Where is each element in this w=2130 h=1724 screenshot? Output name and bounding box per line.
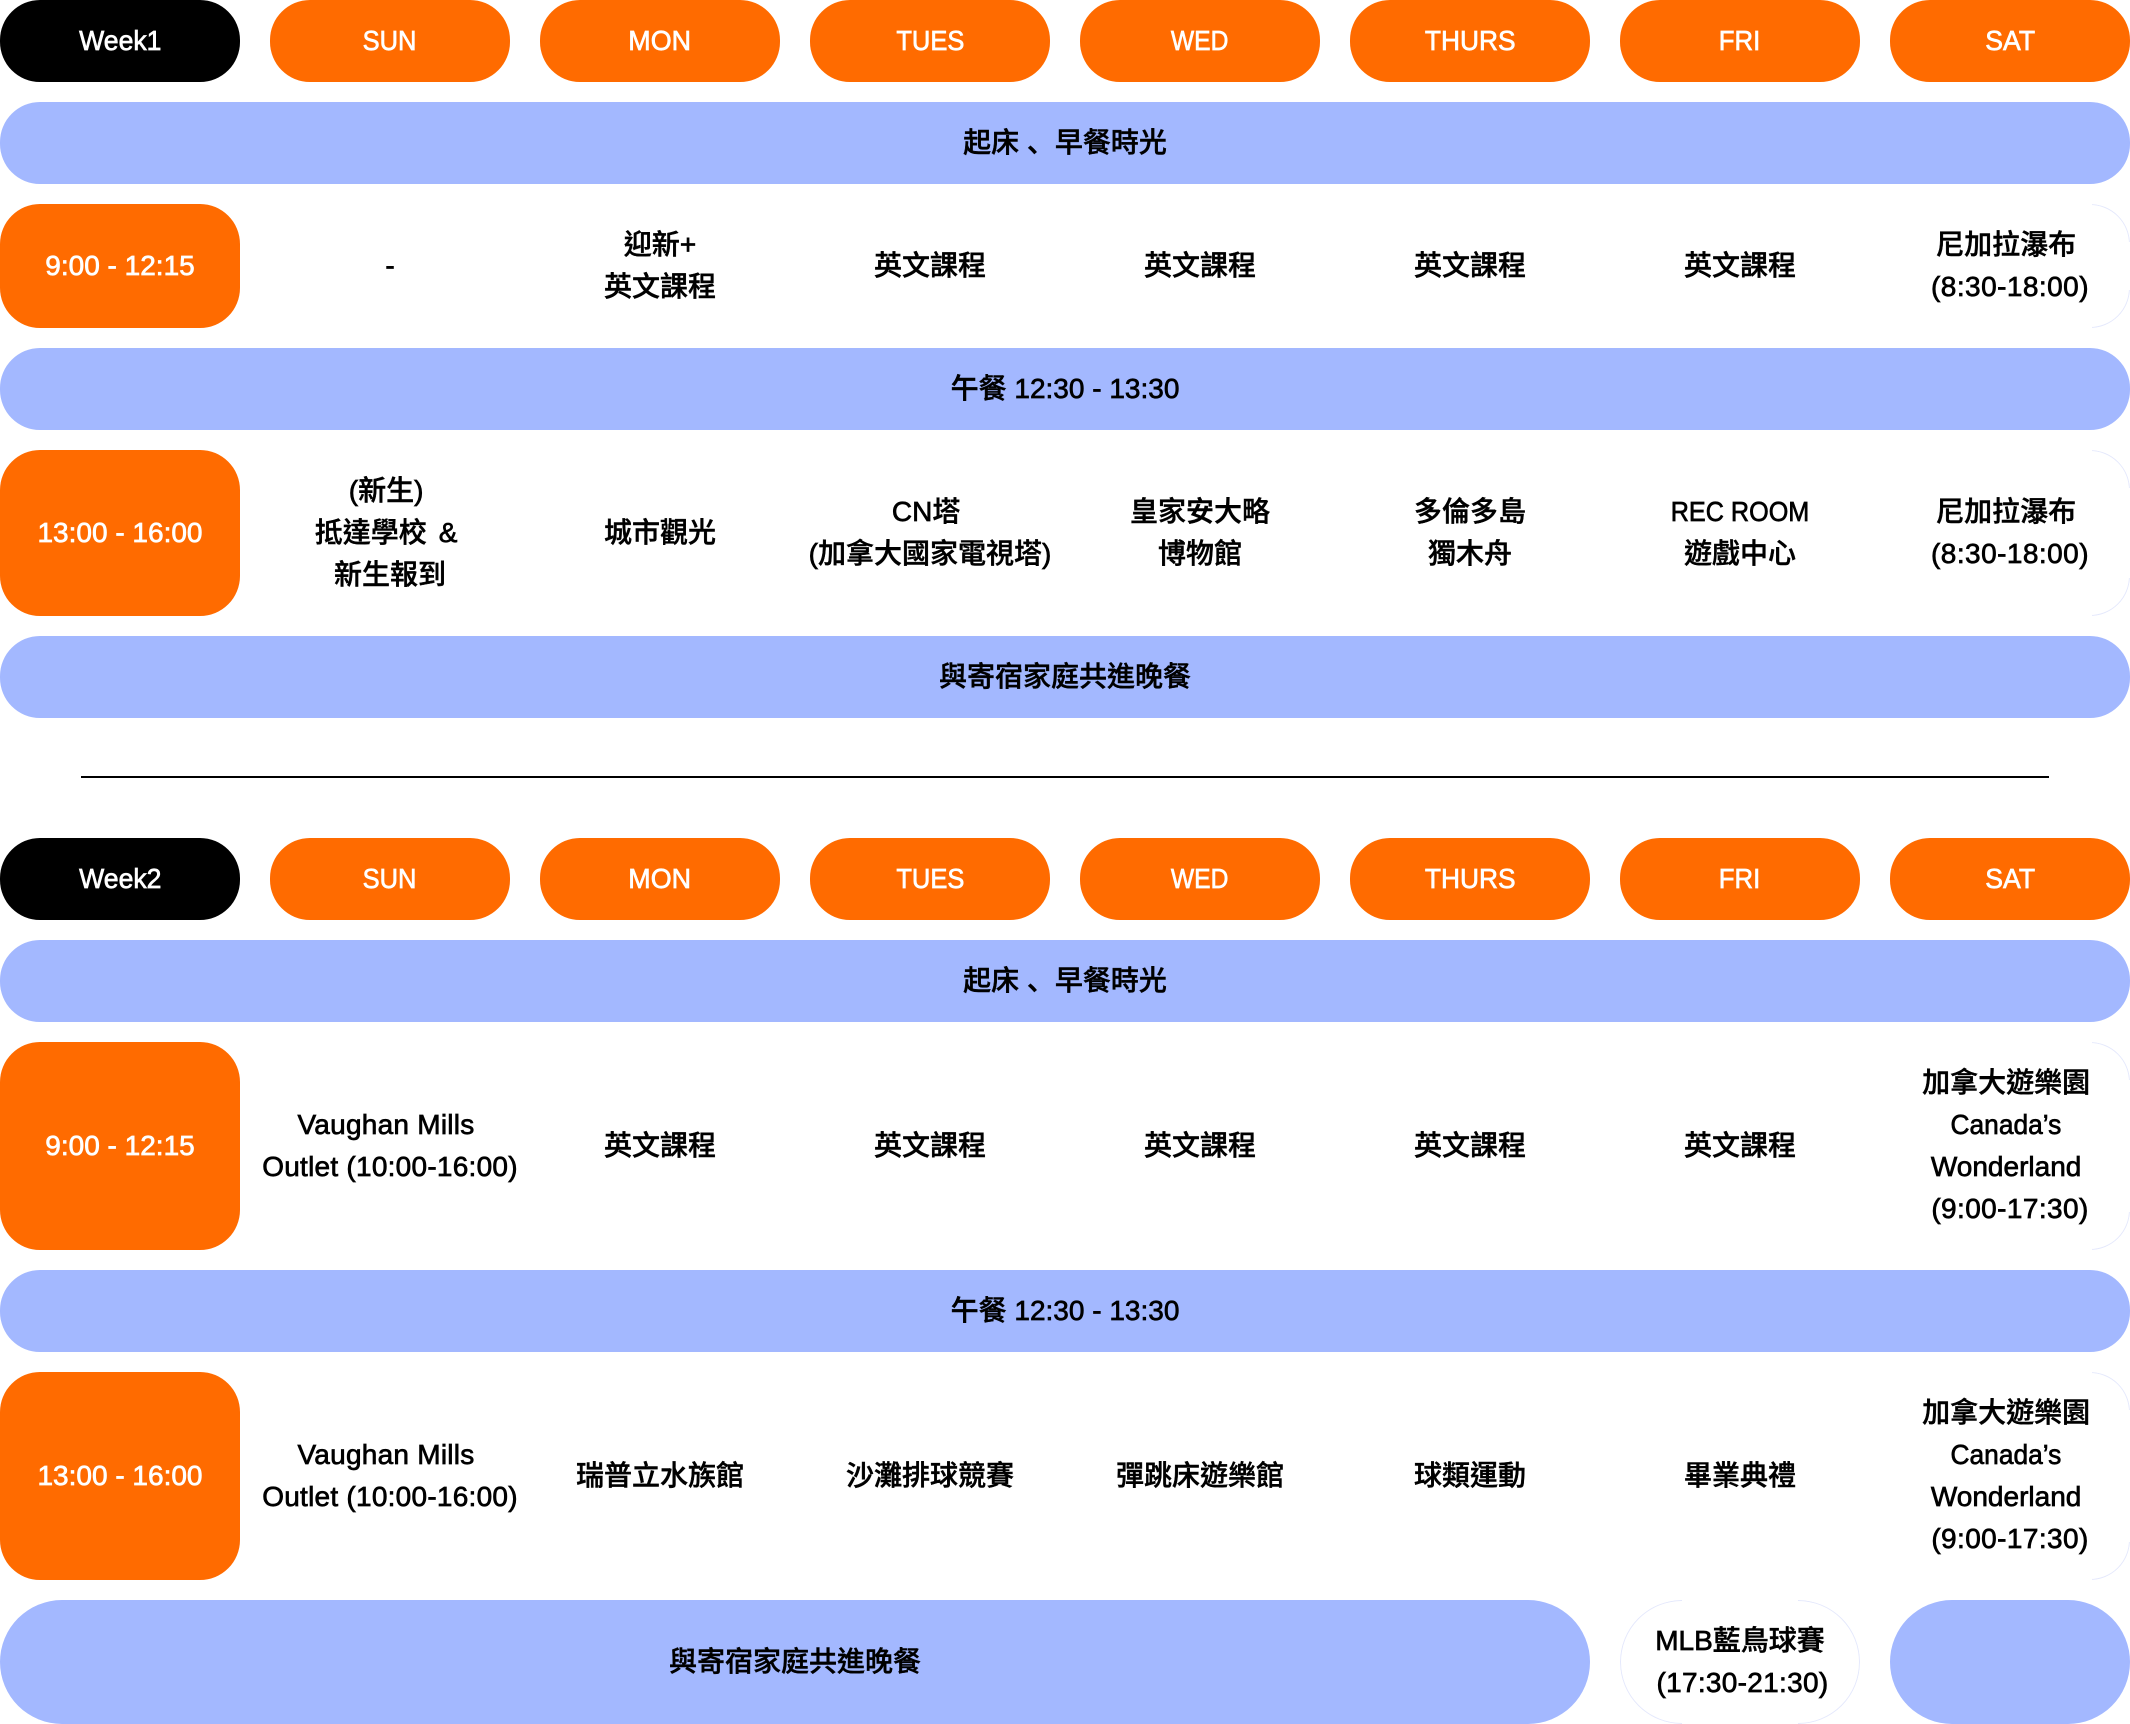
lunch band: 午餐 12:30 - 13:30 (951, 373, 1179, 404)
Friday afternoon cell: 畢業典禮 (1684, 1460, 1796, 1491)
Sunday morning cell: Vaughan Mills (297, 1109, 474, 1140)
Monday morning cell (604, 229, 716, 302)
Tuesday afternoon cell: CN塔 (892, 496, 960, 527)
day header: SUN: SUN (363, 25, 417, 56)
Friday afternoon cell: REC ROOM (1671, 496, 1809, 527)
Saturday afternoon cell (1890, 1372, 2130, 1580)
Thursday morning cell: 英文課程 (1414, 1130, 1526, 1161)
Friday evening cell: MLB game (1620, 1600, 1860, 1724)
Monday afternoon cell: 城市觀光 (604, 517, 716, 548)
Wednesday morning cell: 英文課程 (1144, 1130, 1256, 1161)
Sunday morning cell (262, 1109, 518, 1182)
day header: THURS (1350, 0, 1590, 82)
day header: SAT: SAT (1985, 863, 2035, 894)
dinner band: Sunday to Thursday (0, 1600, 1590, 1724)
Monday morning cell: 迎新+ (624, 229, 696, 260)
Sunday afternoon cell: 抵達學校 & (315, 517, 457, 548)
day header: THURS: THURS (1425, 863, 1515, 894)
time label: morning: 9:00 - 12:15 (45, 250, 195, 281)
Tuesday afternoon cell: (加拿大國家電視塔) (809, 538, 1051, 569)
Saturday morning cell (1890, 1042, 2130, 1250)
Sunday afternoon cell (315, 475, 458, 590)
day header: THURS (1350, 838, 1590, 920)
breakfast band (0, 940, 2130, 1022)
time label: afternoon: 13:00 - 16:00 (37, 1460, 203, 1491)
Thursday afternoon cell: 獨木舟 (1428, 538, 1512, 569)
day header: MON: MON (629, 25, 691, 56)
panel: week 2 schedule (0, 838, 2130, 1724)
Friday evening cell: MLB game: (17:30-21:30) (1656, 1667, 1828, 1698)
day header: TUES: TUES (896, 25, 964, 56)
Friday morning cell: 英文課程 (1684, 250, 1796, 281)
Wednesday afternoon cell: 彈跳床遊樂館 (1116, 1460, 1284, 1491)
day header: WED: WED (1171, 863, 1229, 894)
Saturday morning cell: (9:00-17:30) (1931, 1193, 2089, 1224)
Saturday afternoon cell: Wonderland (1931, 1481, 2081, 1512)
time label: morning (0, 1042, 240, 1250)
day header: WED (1080, 0, 1320, 82)
Thursday afternoon cell: 多倫多島 (1414, 496, 1526, 527)
day header: TUES (810, 0, 1050, 82)
Friday evening cell: MLB game: MLB藍鳥球賽 (1655, 1625, 1825, 1656)
day header: WED: WED (1171, 25, 1229, 56)
day header: SAT (1890, 838, 2130, 920)
day header: MON (540, 0, 780, 82)
lunch band (0, 348, 2130, 430)
day header: TUES (810, 838, 1050, 920)
breakfast band: 起床 、早餐時光 (963, 959, 1167, 999)
dinner band: Sunday to Thursday: 與寄宿家庭共進晚餐 (669, 1646, 921, 1677)
Monday morning cell: 英文課程 (604, 271, 716, 302)
Sunday afternoon cell: Vaughan Mills (297, 1439, 474, 1470)
day header: THURS: THURS (1425, 25, 1515, 56)
week 2 label (0, 838, 240, 920)
day header: FRI: FRI (1719, 863, 1761, 894)
Saturday afternoon cell: 尼加拉瀑布 (1936, 496, 2076, 527)
Sunday afternoon cell (262, 1439, 518, 1512)
Saturday morning cell (1890, 204, 2130, 328)
Monday morning cell: 英文課程 (604, 1130, 716, 1161)
week 1 label: Week1 (79, 25, 161, 56)
Wednesday afternoon cell (1130, 496, 1270, 569)
Sunday afternoon cell: (新生) (349, 475, 423, 506)
Saturday morning cell: Wonderland (1931, 1151, 2081, 1182)
Saturday afternoon cell: Canada’s (1951, 1439, 2061, 1470)
lunch band (0, 1270, 2130, 1352)
Wednesday afternoon cell: 博物館 (1158, 538, 1242, 569)
panel: week 1 schedule (0, 0, 2130, 718)
Sunday afternoon cell: Outlet (10:00-16:00) (262, 1481, 518, 1512)
dinner band: 與寄宿家庭共進晚餐 (939, 661, 1191, 692)
Thursday morning cell: 英文課程 (1414, 250, 1526, 281)
Saturday evening block (1890, 1600, 2130, 1724)
Saturday morning cell: (8:30-18:00) (1931, 271, 2089, 302)
day header: SUN (270, 838, 510, 920)
day header: SUN: SUN (363, 863, 417, 894)
Saturday morning cell: 尼加拉瀑布 (1936, 229, 2076, 260)
time label: morning: 9:00 - 12:15 (45, 1130, 195, 1161)
Sunday afternoon cell: 新生報到 (334, 559, 446, 590)
time label: morning (0, 204, 240, 328)
time label: afternoon (0, 1372, 240, 1580)
Tuesday afternoon cell (809, 496, 1051, 570)
Tuesday morning cell: 英文課程 (874, 1130, 986, 1161)
Friday morning cell: 英文課程 (1684, 1130, 1796, 1161)
Friday afternoon cell: 遊戲中心 (1684, 538, 1796, 569)
breakfast band: 起床 、早餐時光 (963, 121, 1167, 161)
day header: MON (540, 838, 780, 920)
Tuesday afternoon cell: 沙灘排球競賽 (846, 1460, 1014, 1491)
lunch band: 午餐 12:30 - 13:30 (951, 1295, 1179, 1326)
day header: FRI (1620, 838, 1860, 920)
time label: afternoon (0, 450, 240, 616)
day header: SAT (1890, 0, 2130, 82)
dinner band (0, 636, 2130, 718)
Thursday afternoon cell (1414, 496, 1526, 569)
day header: FRI (1620, 0, 1860, 82)
time label: afternoon: 13:00 - 16:00 (37, 517, 203, 548)
Sunday morning cell: Outlet (10:00-16:00) (262, 1151, 518, 1182)
Wednesday morning cell: 英文課程 (1144, 250, 1256, 281)
breakfast band (0, 102, 2130, 184)
Saturday morning cell: 加拿大遊樂園 (1922, 1067, 2090, 1098)
Saturday morning cell: Canada’s (1951, 1109, 2061, 1140)
day header: SUN (270, 0, 510, 82)
Sunday morning cell: - (385, 250, 395, 281)
day header: FRI: FRI (1719, 25, 1761, 56)
day header: TUES: TUES (896, 863, 964, 894)
Saturday afternoon cell (1890, 450, 2130, 616)
Saturday afternoon cell: 加拿大遊樂園 (1922, 1397, 2090, 1428)
day header: SAT: SAT (1985, 25, 2035, 56)
Monday afternoon cell: 瑞普立水族館 (576, 1460, 744, 1491)
Tuesday morning cell: 英文課程 (874, 250, 986, 281)
week 1 label (0, 0, 240, 82)
Thursday afternoon cell: 球類運動 (1414, 1460, 1526, 1491)
day header: WED (1080, 838, 1320, 920)
Saturday afternoon cell: (8:30-18:00) (1931, 538, 2089, 569)
Saturday afternoon cell: (9:00-17:30) (1931, 1523, 2089, 1554)
Friday afternoon cell (1671, 496, 1809, 569)
Wednesday afternoon cell: 皇家安大略 (1130, 496, 1270, 527)
week 2 label: Week2 (79, 863, 161, 894)
day header: MON: MON (629, 863, 691, 894)
